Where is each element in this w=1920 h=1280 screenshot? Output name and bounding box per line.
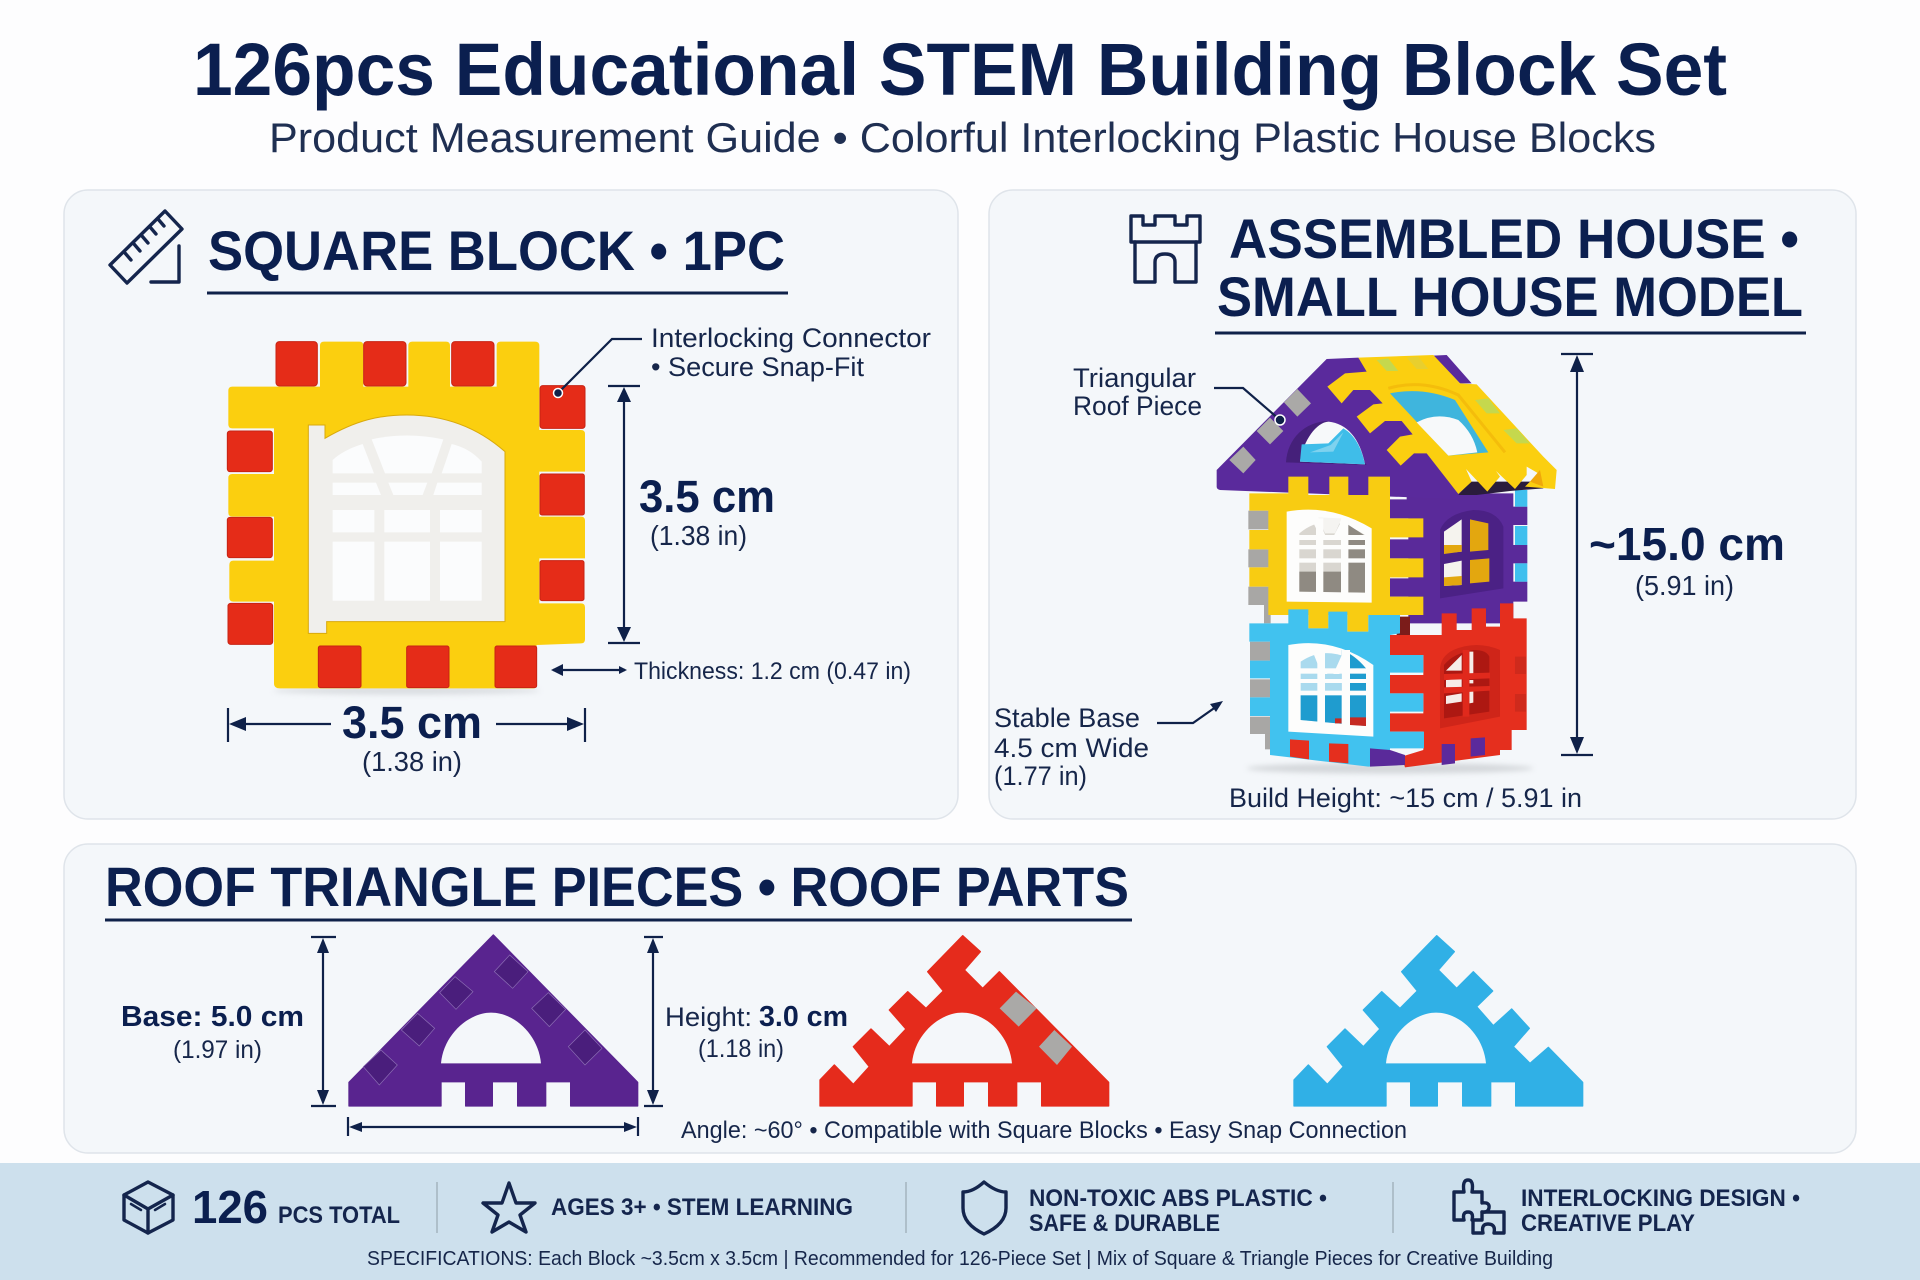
dimension: base width	[348, 1117, 638, 1136]
callout: interlocking connector	[554, 323, 931, 398]
yellow frame	[228, 342, 585, 688]
title: 126pcs Educational STEM Building Block Set	[193, 28, 1727, 111]
dimension: house height: (5.91 in)	[1635, 570, 1734, 601]
subtitle: Product Measurement Guide • Colorful Interlocking Plastic House Blocks	[269, 114, 1656, 161]
red connectors	[227, 342, 585, 688]
dimension: house height	[1561, 354, 1785, 755]
callout: stable base	[994, 701, 1223, 791]
callout: stable base: 4.5 cm Wide	[994, 733, 1149, 763]
heading: assembled house: ASSEMBLED HOUSE •	[1229, 207, 1799, 270]
text: ages: AGES 3+ • STEM LEARNING	[551, 1194, 853, 1221]
callout: triangular roof piece: Triangular	[1073, 363, 1196, 393]
label: base: Base: 5.0 cm	[121, 1001, 304, 1033]
white window	[308, 415, 505, 633]
dimension: horizontal 3.5 cm	[228, 697, 585, 777]
text: non-toxic	[1029, 1185, 1327, 1237]
callout: interlocking connector: • Secure Snap-Fit	[651, 352, 864, 382]
dimension: house height: ~15.0 cm	[1589, 518, 1785, 570]
heading: assembled house: SMALL HOUSE MODEL	[1217, 265, 1803, 328]
panel: square block	[64, 190, 958, 819]
roof: back purple strip	[1433, 355, 1472, 383]
panel: roof triangle pieces	[64, 844, 1856, 1153]
icon: box	[124, 1182, 173, 1233]
heading: square block: SQUARE BLOCK • 1PC	[208, 219, 785, 282]
red side block	[1390, 603, 1527, 767]
text: interlocking: INTERLOCKING DESIGN •	[1521, 1185, 1800, 1212]
dimension: vertical 3.5 cm: 3.5 cm	[639, 471, 775, 522]
dimension: vertical 3.5 cm	[608, 386, 775, 643]
label: height	[665, 1001, 848, 1063]
triangle: purple	[349, 935, 638, 1106]
square block photo	[227, 342, 585, 695]
note: angle and compatibility: Angle: ~60° • Compatible with Square Blocks • Easy Snap Connection	[681, 1117, 1407, 1144]
callout: triangular roof piece	[1073, 363, 1285, 425]
text: non-toxic: NON-TOXIC ABS PLASTIC •	[1029, 1185, 1327, 1212]
stat: 126 pcs total: 126	[192, 1181, 268, 1233]
icon: star	[483, 1183, 535, 1232]
yellow block window	[1287, 510, 1372, 603]
icon: shield	[963, 1182, 1006, 1234]
label: base: (1.97 in)	[173, 1036, 262, 1064]
purple side block	[1390, 490, 1527, 623]
text: non-toxic: SAFE & DURABLE	[1029, 1210, 1220, 1237]
build height note: Build Height: ~15 cm / 5.91 in	[1229, 783, 1582, 813]
panel: assembled house	[989, 190, 1856, 819]
stat: 126 pcs total: PCS TOTAL	[278, 1202, 400, 1229]
icon: castle	[1131, 216, 1200, 282]
dimension: horizontal 3.5 cm: 3.5 cm	[342, 697, 482, 748]
roof: yellow side panel	[1327, 355, 1557, 494]
dimension: thickness: Thickness: 1.2 cm (0.47 in)	[634, 658, 911, 685]
callout: stable base: Stable Base	[994, 703, 1140, 733]
footer band	[0, 1163, 1920, 1280]
dimension: vertical 3.5 cm: (1.38 in)	[650, 520, 747, 551]
label: height: Height:	[665, 1002, 752, 1032]
label: height: (1.18 in)	[698, 1035, 784, 1063]
roof: shadow below teeth	[1458, 482, 1543, 495]
blue block window	[1288, 643, 1373, 737]
house photo	[1217, 355, 1557, 774]
roof: purple gable	[1217, 358, 1473, 499]
specifications line: SPECIFICATIONS: Each Block ~3.5cm x 3.5cm | Recommended for 126-Piece Set | Mix of Square & Triangle Pieces for Creative Building	[367, 1248, 1553, 1270]
icon: puzzle	[1454, 1180, 1504, 1233]
text: interlocking: CREATIVE PLAY	[1521, 1210, 1695, 1237]
roof: grey slots	[1229, 389, 1311, 473]
triangle: blue	[1294, 936, 1583, 1106]
roof	[1217, 355, 1557, 499]
blue front block	[1249, 609, 1424, 767]
dimension: horizontal 3.5 cm: (1.38 in)	[362, 746, 462, 777]
triangle: red	[820, 936, 1109, 1106]
heading: roof triangle pieces: ROOF TRIANGLE PIECES • ROOF PARTS	[105, 855, 1129, 918]
dimension: right vertical	[644, 937, 663, 1106]
callout: interlocking connector: Interlocking Connector	[651, 323, 931, 353]
stat: 126 pcs total	[192, 1181, 400, 1233]
callout: stable base: (1.77 in)	[994, 761, 1087, 791]
heading: assembled house	[1215, 207, 1806, 334]
yellow front block	[1248, 511, 1271, 623]
callout: triangular roof piece: Roof Piece	[1073, 391, 1202, 421]
text: interlocking	[1521, 1185, 1800, 1237]
label: base	[121, 1001, 304, 1064]
icon: ruler	[110, 211, 182, 283]
dimension: left vertical	[311, 937, 336, 1106]
label: height: 3.0 cm	[759, 1001, 848, 1033]
